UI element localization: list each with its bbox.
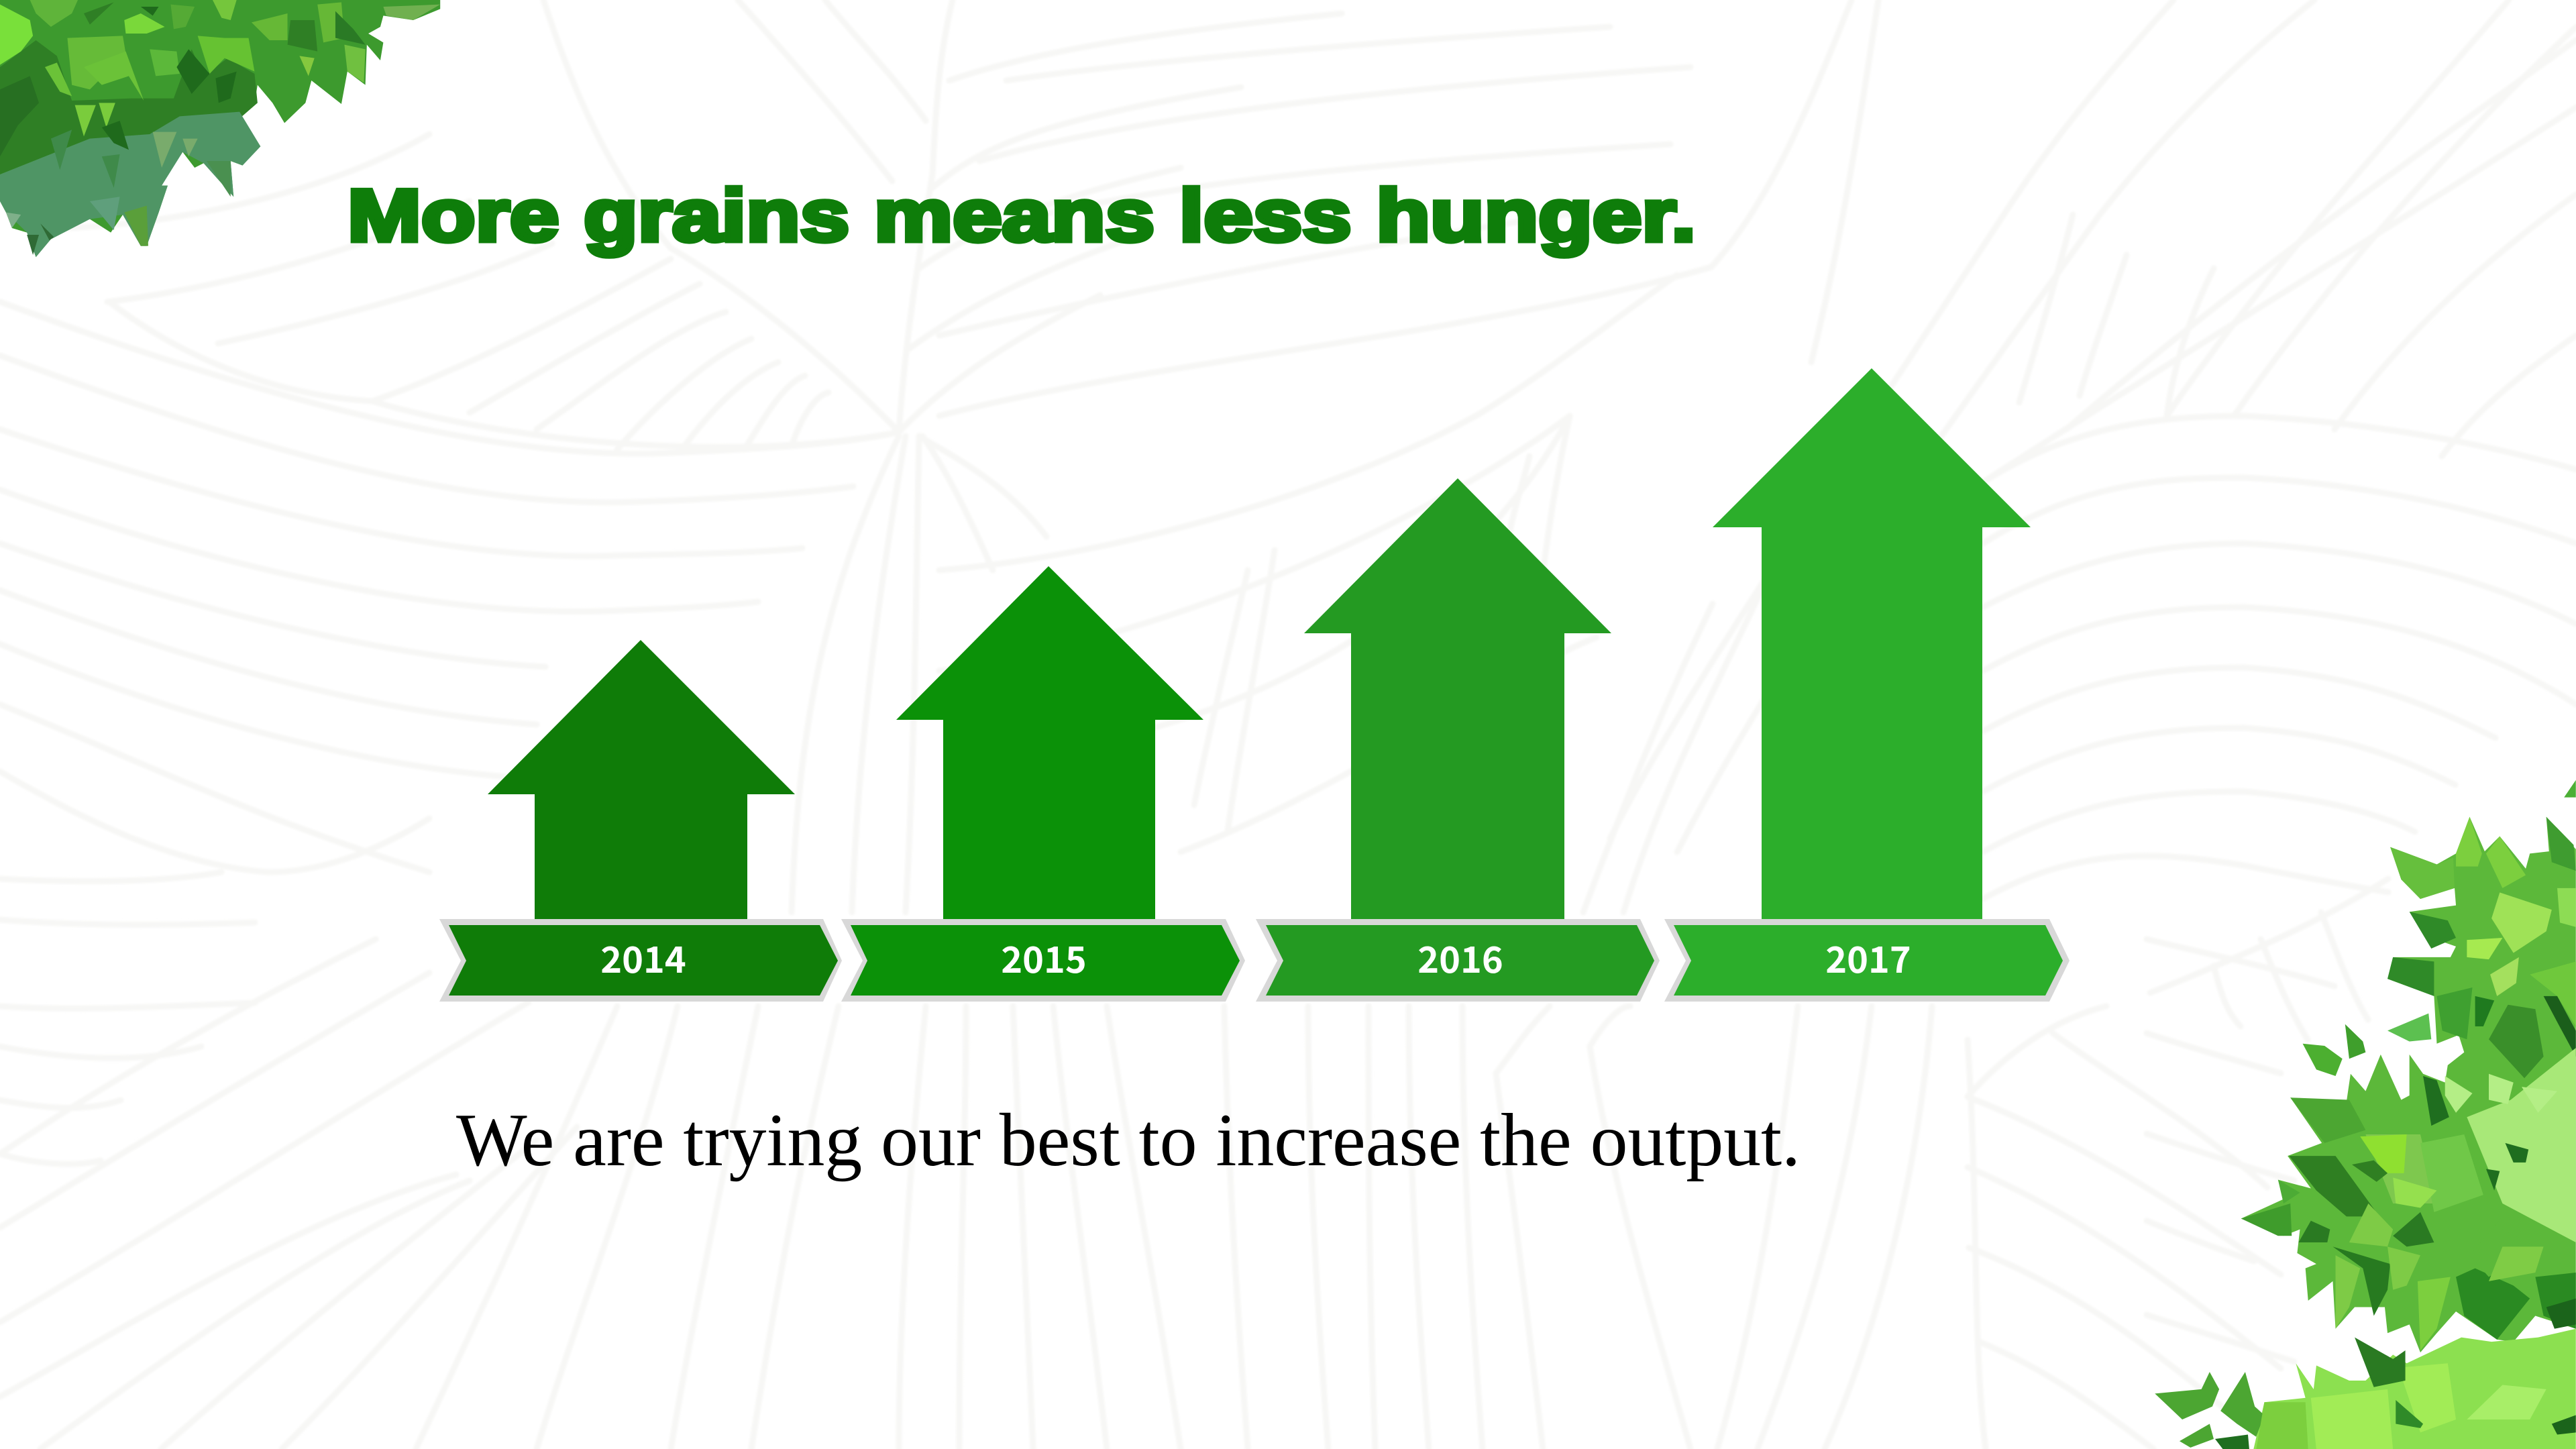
arrow 2014 (488, 640, 795, 919)
body text: We are trying our best to increase the output. (456, 1099, 1801, 1182)
arrow 2016 (1304, 478, 1611, 919)
year chevron 2017: 2017 (1825, 930, 1911, 983)
year chevron 2014: 2014 (600, 930, 686, 983)
arrow 2017 (1713, 368, 2031, 919)
year chevron 2014 (439, 919, 842, 1002)
year chevron 2017 (1664, 919, 2070, 1002)
year chevron 2015: 2015 (1001, 930, 1087, 983)
year chevron 2015 (841, 919, 1245, 1002)
year chevron 2016: 2016 (1417, 930, 1503, 983)
year chevron 2016 (1256, 919, 1660, 1002)
arrow chart: yearly output (439, 368, 2070, 1002)
decoration: bottom-right foliage (2155, 780, 2576, 1449)
title: More grains means less hunger. (347, 174, 1696, 257)
decoration: top-left foliage (0, 0, 440, 257)
arrow 2015 (896, 566, 1203, 919)
